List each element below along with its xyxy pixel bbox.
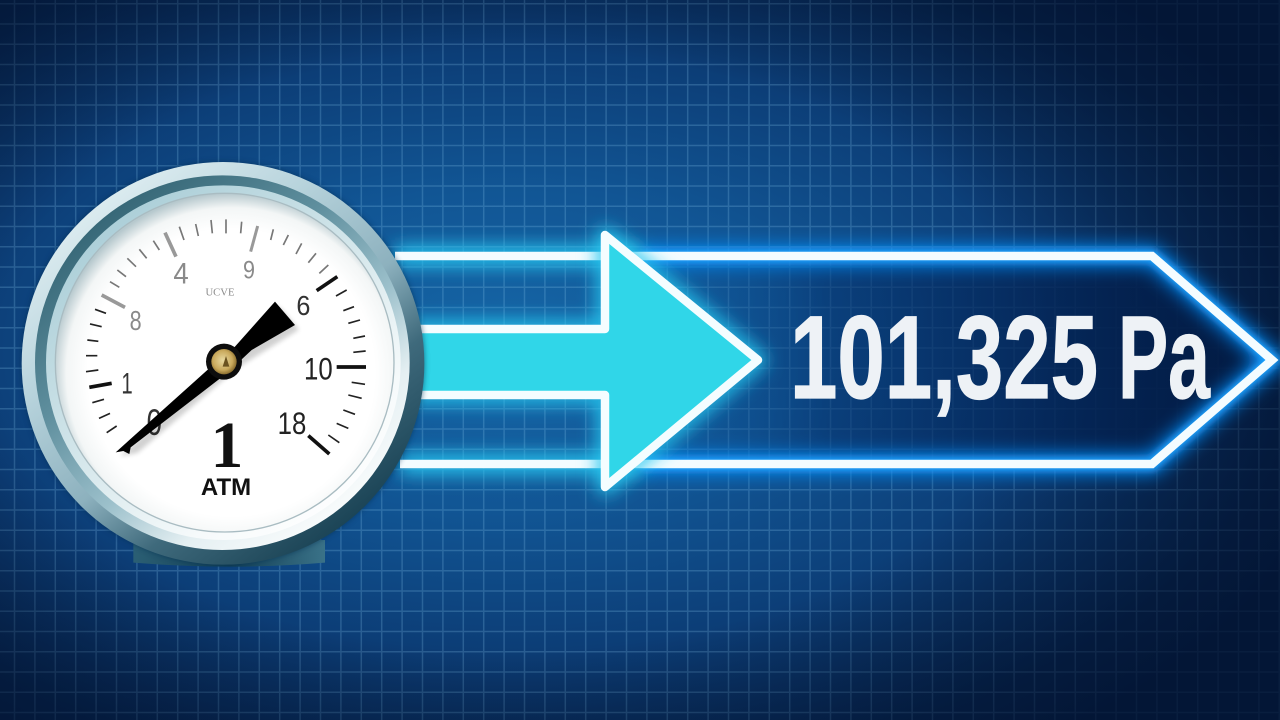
dial numbers: 4 xyxy=(173,257,189,290)
value: 101,325 Pa: Pa xyxy=(1118,292,1211,424)
gauge stand xyxy=(133,540,325,567)
reading: 1 ATM xyxy=(201,410,251,501)
dial numbers: 6 xyxy=(296,290,310,321)
dial numbers xyxy=(121,256,333,443)
dial numbers: 0 xyxy=(147,402,162,443)
dial numbers: 9 xyxy=(243,256,255,284)
major tick marks xyxy=(89,226,366,454)
arrow: cyan block arrow from gauge to value xyxy=(410,235,758,487)
metal bezel xyxy=(21,161,425,565)
dial numbers: 18 xyxy=(278,406,306,441)
dial numbers: 1 xyxy=(121,367,133,400)
dial numbers: 8 xyxy=(130,305,142,336)
gauge: 1 ATM pressure gauge xyxy=(21,161,425,567)
dial numbers: 10 xyxy=(304,351,333,386)
needle hub xyxy=(206,344,242,380)
dial numbers: UCVE xyxy=(205,287,235,298)
reading: 1 ATM: 1 xyxy=(211,410,243,482)
needle xyxy=(116,302,299,456)
gauge face xyxy=(55,193,394,532)
output box: glowing pentagon outline xyxy=(395,256,1272,464)
reading: 1 ATM: ATM xyxy=(201,474,251,501)
value: 101,325 Pa: 101,325 xyxy=(790,292,1098,424)
minor tick marks xyxy=(86,219,366,443)
